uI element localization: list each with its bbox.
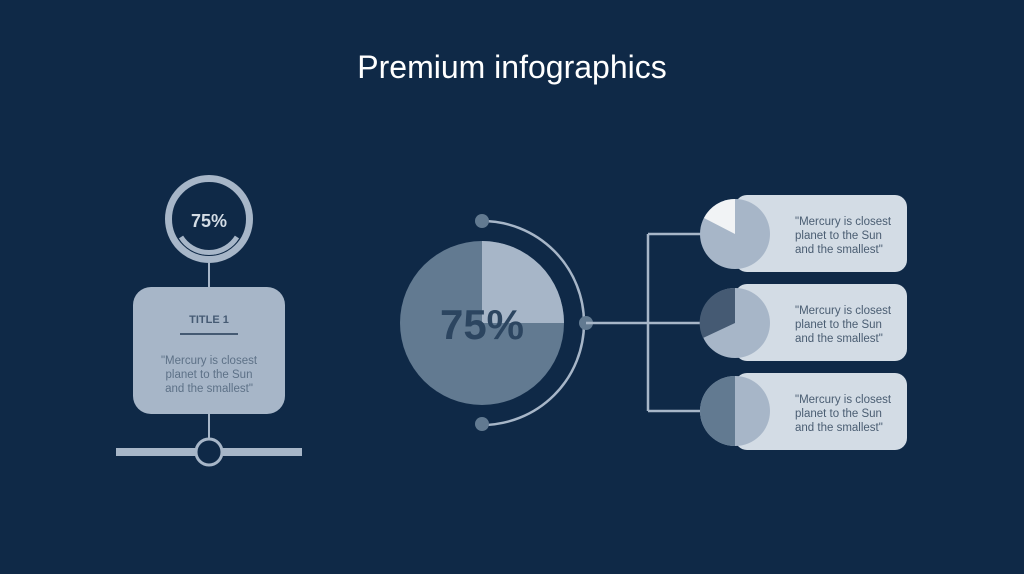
donut 75%: 75% bbox=[191, 211, 227, 231]
timeline bar bbox=[116, 439, 302, 465]
card 3 bbox=[700, 373, 907, 450]
card 3: "Mercury is closest bbox=[795, 394, 892, 406]
card 2 bbox=[700, 284, 907, 361]
card: title 1: "Mercury is closest bbox=[161, 355, 258, 367]
card 1: planet to the Sun bbox=[795, 230, 882, 242]
title: Premium infographics bbox=[357, 49, 667, 85]
card 3: planet to the Sun bbox=[795, 408, 882, 420]
connectors bbox=[586, 234, 702, 411]
donut 75% bbox=[168, 178, 250, 260]
card: title 1: and the smallest" bbox=[165, 383, 253, 395]
card 1 bbox=[700, 195, 907, 272]
panel: left column bbox=[116, 178, 302, 465]
card 2: planet to the Sun bbox=[795, 319, 882, 331]
chart: center pie: 75% bbox=[440, 301, 524, 348]
card 1: "Mercury is closest bbox=[795, 216, 892, 228]
card: title 1: planet to the Sun bbox=[166, 369, 252, 381]
card 3: and the smallest" bbox=[795, 422, 883, 434]
card 1: and the smallest" bbox=[795, 244, 883, 256]
card 2: "Mercury is closest bbox=[795, 305, 892, 317]
card 2: and the smallest" bbox=[795, 333, 883, 345]
card: title 1: TITLE 1 bbox=[189, 314, 229, 326]
card: title 1 bbox=[133, 287, 285, 414]
chart: center pie bbox=[400, 214, 593, 431]
